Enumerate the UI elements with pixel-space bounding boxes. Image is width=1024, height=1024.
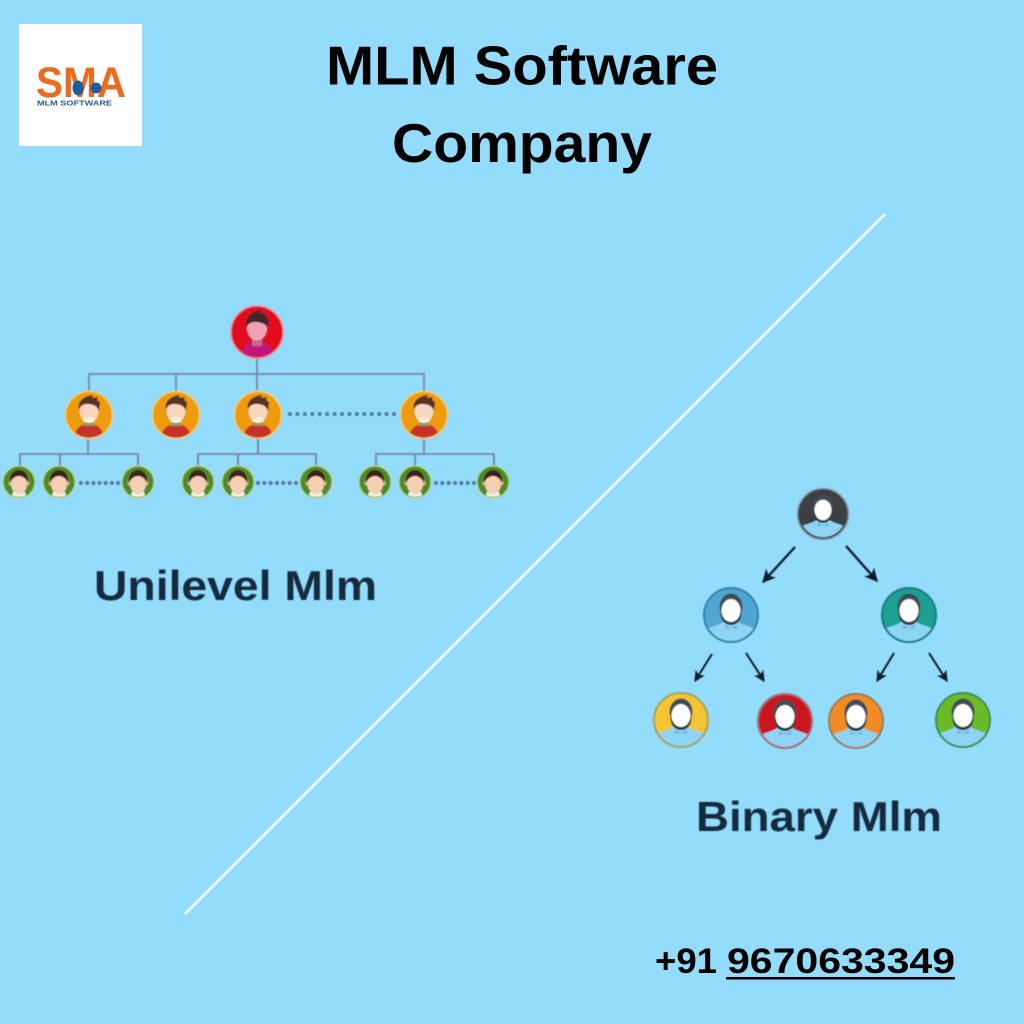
avatars: binary third level xyxy=(654,693,990,748)
avatars: third level xyxy=(3,466,509,498)
avatars: second level xyxy=(66,392,448,444)
logo icon: mouse and ball xyxy=(72,80,102,96)
title: Company xyxy=(392,112,652,174)
label: Binary Mlm: Binary Mlm xyxy=(696,793,942,840)
dotted connectors xyxy=(81,414,475,483)
diagram: binary MLM xyxy=(654,488,990,748)
phone number xyxy=(655,942,955,981)
diagram: unilevel MLM xyxy=(3,306,509,498)
connector lines xyxy=(20,358,494,466)
arrows xyxy=(695,546,947,681)
logo caption: MLM SOFTWARE xyxy=(37,98,112,108)
label: Unilevel Mlm: Unilevel Mlm xyxy=(94,562,377,609)
avatar: binary root xyxy=(798,488,848,540)
diagonal divider xyxy=(185,214,885,914)
phone number: +91 xyxy=(655,942,717,981)
title xyxy=(326,34,718,174)
avatars: binary second level xyxy=(704,588,936,642)
phone number: 9670633349 xyxy=(727,942,955,981)
logo wordmark: SMA xyxy=(36,59,126,107)
avatar: root xyxy=(231,306,283,358)
logo panel xyxy=(19,24,142,146)
title: MLM Software xyxy=(326,34,718,96)
